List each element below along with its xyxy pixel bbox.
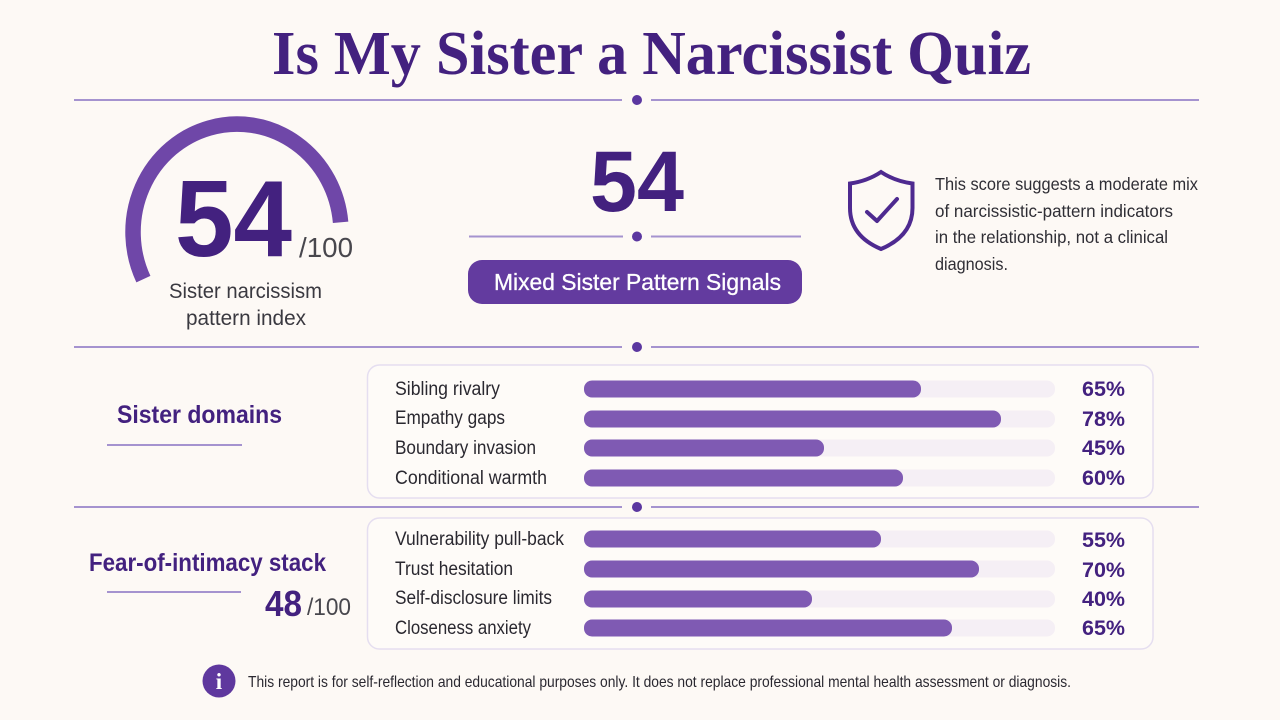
row: trust hesitation 70%: Trust hesitation <box>395 559 513 580</box>
title: Is My Sister a Narcissist Quiz <box>272 20 1031 88</box>
central score: 54 <box>590 134 684 230</box>
row: boundary invasion 45%: Boundary invasion <box>395 438 536 459</box>
row: closeness anxiety 65%: Closeness anxiety <box>395 618 531 639</box>
interpretation text: diagnosis. <box>935 254 1008 274</box>
row: boundary invasion 45%: 45% <box>1082 437 1125 460</box>
row: self-disclosure limits 40% <box>395 588 1125 611</box>
icon: information: i <box>216 669 223 694</box>
row: boundary invasion 45% <box>395 437 1125 460</box>
icon: shield with check mark <box>850 172 912 249</box>
row: empathy gaps 78%: 78% <box>1082 408 1125 431</box>
interpretation text: This score suggests a moderate mix <box>935 174 1198 194</box>
row: trust hesitation 70%: 70% <box>1082 559 1125 582</box>
row: conditional warmth 60%: 60% <box>1082 467 1125 490</box>
gauge caption: Sister narcissism <box>169 280 322 303</box>
gauge caption: pattern index <box>186 307 306 330</box>
footer disclaimer <box>202 664 1071 698</box>
row: sibling rivalry 65%: Sibling rivalry <box>395 379 500 400</box>
row: closeness anxiety 65% <box>395 617 1125 640</box>
panel: interpretation note <box>850 172 1198 274</box>
heading: fear-of-intimacy stack with score <box>89 549 351 624</box>
row: self-disclosure limits 40%: Self-disclosure limits <box>395 588 552 609</box>
interpretation text <box>935 174 1198 274</box>
panel: score gauge <box>133 124 353 330</box>
interpretation text: in the relationship, not a clinical <box>935 227 1168 247</box>
row: vulnerability pull-back 55%: Vulnerability pull-back <box>395 529 564 550</box>
heading: fear-of-intimacy stack with score: /100 <box>307 594 351 621</box>
gauge arc <box>133 124 341 279</box>
row: empathy gaps 78% <box>395 408 1125 431</box>
heading: fear-of-intimacy stack with score: 48 <box>265 583 302 624</box>
row: vulnerability pull-back 55% <box>395 529 1125 552</box>
panel: central score and status <box>468 134 802 304</box>
row: sibling rivalry 65%: 65% <box>1082 378 1125 401</box>
panel: sister domains bar chart <box>368 365 1153 498</box>
status pill <box>468 260 802 304</box>
row: vulnerability pull-back 55%: 55% <box>1082 529 1125 552</box>
row: conditional warmth 60% <box>395 467 1125 490</box>
status pill: Mixed Sister Pattern Signals <box>494 269 781 295</box>
row: sibling rivalry 65% <box>395 378 1125 401</box>
gauge scale: /100 <box>299 232 353 263</box>
gauge caption <box>169 280 322 330</box>
row: trust hesitation 70% <box>395 559 1125 582</box>
heading: fear-of-intimacy stack with score: Fear-of-intimacy stack <box>89 549 326 577</box>
disclaimer text: This report is for self-reflection and educational purposes only. It does not replace professional mental health assessment or diagnosis. <box>248 674 1071 691</box>
interpretation text: of narcissistic-pattern indicators <box>935 201 1173 221</box>
gauge score: 54 <box>175 158 292 280</box>
row: empathy gaps 78%: Empathy gaps <box>395 408 505 429</box>
row: closeness anxiety 65%: 65% <box>1082 617 1125 640</box>
icon: information <box>202 664 236 698</box>
panel: fear-of-intimacy bar chart <box>368 518 1153 649</box>
row: conditional warmth 60%: Conditional warmth <box>395 468 547 489</box>
row: self-disclosure limits 40%: 40% <box>1082 588 1125 611</box>
heading: sister domains: Sister domains <box>117 401 282 429</box>
